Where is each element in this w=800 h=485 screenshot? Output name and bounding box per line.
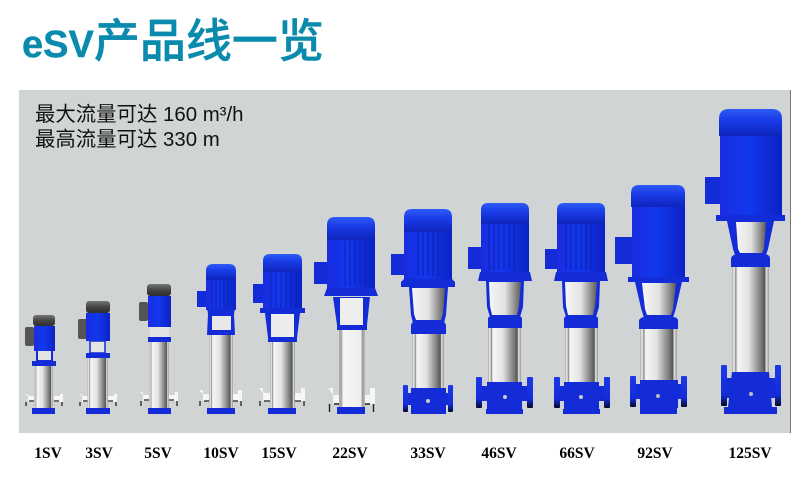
model labels	[34, 445, 772, 462]
text block: maximum flow and head	[35, 103, 243, 151]
pump: 5SV	[139, 284, 178, 414]
text block: maximum flow and head: 最高流量可达 330 m	[35, 128, 220, 151]
model labels: 1SV	[34, 445, 63, 462]
pump: 66SV	[545, 203, 610, 414]
model labels: 46SV	[481, 445, 517, 462]
pump: 92SV	[615, 185, 689, 414]
model labels: 5SV	[144, 445, 173, 462]
pump: 125SV	[705, 109, 785, 414]
pump: 10SV	[197, 264, 242, 414]
pump: 46SV	[468, 203, 533, 414]
title: eSV产品线一览	[22, 5, 324, 71]
model labels: 33SV	[410, 445, 446, 462]
pump: 1SV	[25, 315, 63, 414]
model labels: 66SV	[559, 445, 595, 462]
model labels: 3SV	[85, 445, 114, 462]
model labels: 22SV	[332, 445, 368, 462]
model labels: 125SV	[728, 445, 772, 462]
panel: product line background	[19, 90, 791, 433]
pump: 15SV	[253, 254, 305, 414]
pump: 3SV	[78, 301, 117, 414]
model labels: 92SV	[637, 445, 673, 462]
model labels: 15SV	[261, 445, 297, 462]
model labels: 10SV	[203, 445, 239, 462]
pump: 22SV	[314, 217, 378, 414]
pump: 33SV	[391, 209, 455, 414]
text block: maximum flow and head: 最大流量可达 160 m³/h	[35, 103, 243, 126]
